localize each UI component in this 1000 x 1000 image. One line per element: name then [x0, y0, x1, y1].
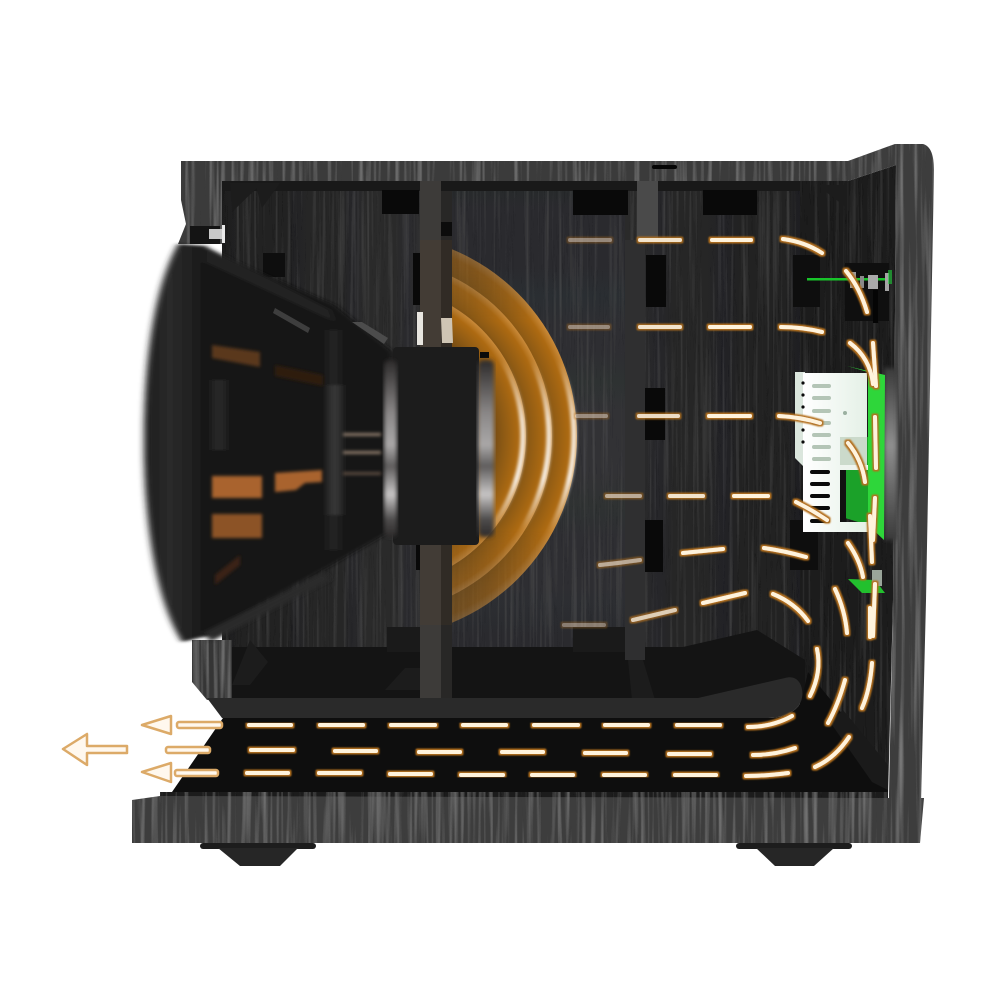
exit arrow: middle [63, 734, 210, 765]
panel: cabinet interior back wall [222, 180, 848, 700]
amplifier back heat-sink plate [795, 372, 805, 468]
driver: magnet [384, 347, 494, 545]
panel: right inner side wall [800, 165, 896, 798]
exit arrow: bottom [142, 763, 218, 782]
driver: copper voice windows [212, 345, 381, 585]
amplifier green circuit board [840, 366, 885, 540]
airflow: dashes through the chamber [683, 239, 876, 776]
airflow: dashes through the bottom port [247, 725, 720, 775]
panel: front baffle lower [192, 640, 232, 700]
airflow: faded dashes near the woofer [564, 240, 703, 625]
panel: top board [181, 161, 848, 181]
panel: chamber shelf [207, 677, 802, 718]
panel: front baffle upper [178, 161, 222, 244]
top port slot [652, 165, 677, 169]
top circuit board [807, 270, 892, 323]
left foot [200, 843, 316, 866]
infographic: subwoofer cross-section [62, 144, 934, 866]
exit arrow: top [142, 716, 222, 734]
mounting screw [190, 225, 225, 244]
driver: bolts [417, 312, 453, 345]
panel: lower port chamber floor [160, 672, 888, 798]
amplifier white heat-sink plate [801, 373, 868, 532]
driver: cone and basket silhouette [144, 244, 393, 642]
panel: driver mounting divider board [420, 181, 452, 700]
driver: terminal detail [273, 308, 388, 344]
floor of the upper chamber [232, 630, 805, 700]
panel: bottom board [132, 796, 924, 843]
sound waves: orange arcs [452, 249, 579, 623]
panel: textured floor strip [160, 792, 888, 798]
panel: right side board [848, 144, 934, 843]
right foot [736, 843, 852, 866]
amplifier reflection on side board [884, 368, 897, 540]
lower circuit board [848, 570, 885, 593]
panel: diagonal corner brace [830, 710, 888, 790]
black brace blocks [263, 190, 889, 652]
panel: rear divider board [625, 181, 658, 700]
corner braces [230, 183, 847, 690]
